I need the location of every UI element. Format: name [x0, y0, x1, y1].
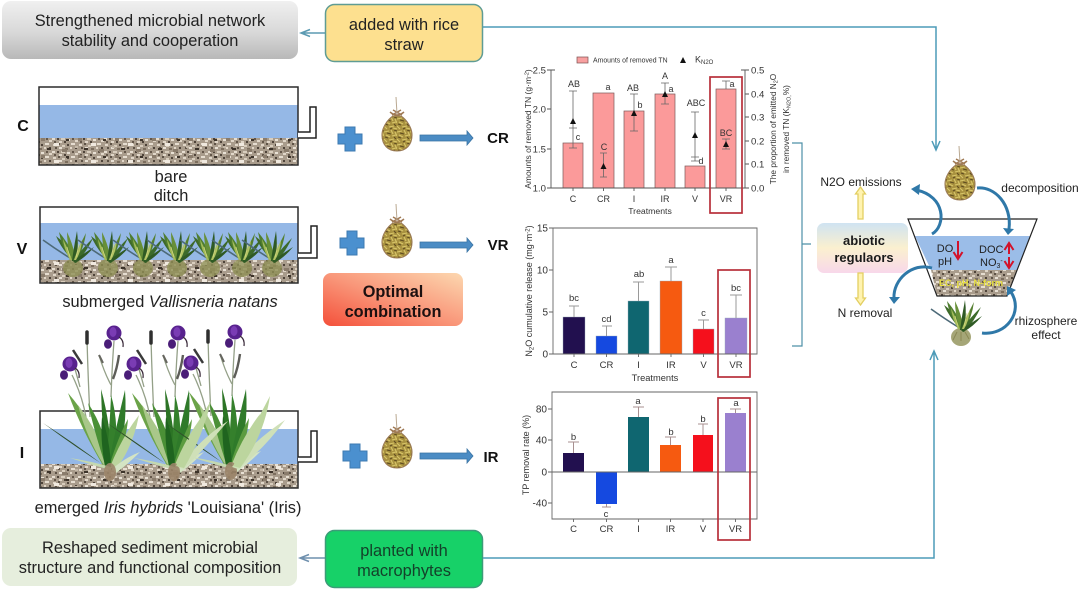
- label: decomposition: decomposition: [1001, 181, 1079, 195]
- legend: K: [695, 54, 701, 64]
- significance letters: c: [701, 308, 706, 319]
- chart: removed TN and KN2O: 0.4: [751, 90, 765, 100]
- significance letters: [569, 255, 741, 325]
- label: rhizosphere effect: [1015, 314, 1078, 342]
- chart: N2O cumulative release: I: [637, 360, 640, 371]
- significance letters: a: [733, 398, 739, 409]
- box: strengthened microbial network: [2, 1, 298, 59]
- label: DO pH: pH: [938, 256, 952, 268]
- chart: removed TN and KN2O: 0.5: [751, 66, 764, 76]
- chart: removed TN and KN2O: N2O,: [786, 95, 792, 108]
- significance letters: b: [571, 432, 576, 443]
- bars: [563, 89, 736, 188]
- icon: straw bag I: [382, 414, 412, 468]
- icon: plus I: [343, 444, 367, 468]
- axes: [547, 70, 749, 191]
- significance letters: c: [576, 132, 581, 142]
- bracket: links charts to mechanism: [792, 143, 811, 346]
- chart: removed TN and KN2O: 2.0: [533, 104, 546, 116]
- diagram: funnel tank: [908, 219, 1037, 296]
- callout: optimal combination: Optimal: [363, 283, 423, 301]
- icon: submerged plant: [931, 300, 982, 346]
- arrow head rhizosphere: [1007, 286, 1016, 296]
- chart: removed TN and KN2O: Amounts of removed TN (g·m: [523, 77, 533, 189]
- caption: bare ditch: ditch: [154, 187, 188, 205]
- callout: optimal combination: [323, 273, 463, 326]
- icon: plus C: [338, 127, 362, 151]
- chart: N2O cumulative release: ): [524, 225, 534, 228]
- box: planted with macrophytes: [326, 530, 482, 588]
- label: N removal: N removal: [838, 306, 892, 320]
- chart: removed TN and KN2O: [523, 54, 792, 216]
- arrow: C to CR: [420, 131, 473, 145]
- significance letters: bc: [731, 283, 741, 294]
- chart: TP removal rate: IR: [666, 524, 675, 535]
- arrow: down to N removal: [856, 273, 866, 305]
- icon: plus V: [340, 231, 364, 255]
- error bars: [568, 407, 741, 507]
- highlight box: [710, 77, 742, 213]
- chart: removed TN and KN2O: IR: [660, 194, 670, 204]
- chart: removed TN and KN2O: 0.3: [751, 112, 764, 124]
- chart: TP removal rate: V: [700, 524, 707, 535]
- highlight box: [718, 398, 750, 540]
- label: VR: VR: [488, 237, 509, 254]
- caption: emerged iris: emerged Iris hybrids 'Louisiana' (Iris): [35, 499, 301, 517]
- box: reshaped sediment: [2, 528, 297, 586]
- legend: [577, 54, 714, 66]
- chart: removed TN and KN2O: -2: [524, 72, 530, 77]
- chart: removed TN and KN2O: CR: [597, 194, 610, 204]
- chart: N2O cumulative release: VR: [729, 360, 743, 371]
- chart: removed TN and KN2O: 0.1: [751, 160, 764, 170]
- chart: removed TN and KN2O: ): [523, 69, 533, 72]
- arrow: I to IR: [420, 449, 473, 463]
- axes: [549, 228, 757, 357]
- arrow: decomposition curve: [977, 188, 1009, 229]
- arrow: up to N2O: [856, 187, 866, 219]
- chart: N2O cumulative release: -2: [526, 228, 532, 234]
- label: CR: CR: [487, 130, 509, 147]
- label: DO pH: [937, 243, 954, 268]
- label: rhizosphere effect: effect: [1031, 328, 1061, 342]
- chart: N2O cumulative release: O cumulative release (mg·m: [524, 234, 534, 347]
- highlight box: [718, 270, 750, 377]
- box: planted with macrophytes: macrophytes: [357, 562, 451, 580]
- chart: TP removal rate: [521, 392, 757, 540]
- label: sediment factors: EC, pH, N-form: [939, 278, 1003, 288]
- error bars: [569, 267, 742, 336]
- panel: tank V: [40, 207, 317, 283]
- arrow: V to VR: [420, 238, 473, 252]
- panel: tank C: [39, 87, 316, 165]
- significance letters: A: [662, 71, 668, 81]
- label: DOC NO3: -: [1000, 258, 1003, 265]
- significance letters: bc: [569, 293, 579, 304]
- chart: TP removal rate: TP removal rate (%): [521, 415, 531, 495]
- significance letters: cd: [601, 314, 612, 325]
- chart: N2O cumulative release: 2: [530, 346, 536, 350]
- significance letters: AB: [627, 83, 639, 93]
- error bars: [569, 81, 730, 177]
- chart: TP removal rate: 40: [536, 436, 547, 446]
- label: DOC NO3: DOC: [979, 244, 1004, 256]
- label: I: I: [20, 445, 24, 462]
- chart: removed TN and KN2O: 1.5: [533, 144, 546, 156]
- box: reshaped sediment: Reshaped sediment microbial: [42, 539, 258, 557]
- icon: straw bag mechanism: [945, 146, 975, 200]
- chart: TP removal rate: 0: [541, 468, 547, 478]
- arrow head N removal: [889, 297, 900, 304]
- label: DOC NO3: 3: [996, 263, 1000, 270]
- chart: N2O cumulative release: N: [524, 350, 534, 357]
- significance letters: a: [729, 79, 735, 89]
- arrow: straw to mechanism: [483, 27, 940, 150]
- chart: TP removal rate: 80: [536, 404, 547, 416]
- chart: TP removal rate: -40: [533, 498, 547, 510]
- bars: [563, 281, 747, 354]
- label: N2O emissions: N2O emissions: [820, 175, 902, 189]
- chart: N2O cumulative release: V: [700, 360, 707, 371]
- chart: TP removal rate: CR: [600, 524, 613, 535]
- chart: removed TN and KN2O: 0.0: [751, 184, 764, 194]
- chart: N2O cumulative release: 5: [542, 308, 548, 318]
- panel: tank I: [40, 324, 317, 488]
- chart: removed TN and KN2O: 2: [774, 80, 780, 83]
- chart: removed TN and KN2O: %): [781, 85, 791, 95]
- arrow: macrophytes to mechanism: [483, 351, 938, 558]
- significance letters: BC: [720, 128, 733, 138]
- chart: removed TN and KN2O: 2.5: [533, 66, 546, 76]
- caption: submerged Vallisneria natans: submerged Vallisneria natans: [62, 293, 278, 311]
- chart: N2O cumulative release: Treatments: [632, 373, 679, 383]
- chart: removed TN and KN2O: The proportion of emitted N: [768, 83, 778, 184]
- significance letters: ABC: [687, 98, 706, 108]
- legend: N2O: [701, 60, 714, 66]
- chart: removed TN and KN2O: V: [692, 194, 698, 204]
- significance letters: a: [668, 84, 674, 94]
- label: C: C: [17, 118, 29, 135]
- significance letters: [571, 396, 739, 520]
- arrow: curved to N2O: [916, 190, 941, 234]
- bars: [563, 413, 746, 504]
- significance letters: b: [668, 427, 674, 438]
- significance letters: [568, 71, 735, 166]
- significance letters: a: [605, 82, 611, 92]
- label: IR: IR: [484, 449, 499, 466]
- arrow: curve to N removal: [894, 267, 932, 298]
- icon: straw bag V: [382, 204, 412, 258]
- box: strengthened microbial network: stability and cooperation: [62, 32, 238, 50]
- box: added with rice straw: [326, 4, 482, 62]
- chart: removed TN and KN2O: in removed TN (K: [781, 108, 791, 173]
- chart: removed TN and KN2O: 0.2: [751, 136, 764, 148]
- label: DOC NO3: NO: [980, 257, 996, 269]
- arrow head decomposition: [1003, 228, 1014, 235]
- chart: N2O cumulative release: [524, 224, 757, 383]
- arrow head N2O: [911, 184, 920, 195]
- chart: N2O cumulative release: 10: [537, 266, 548, 276]
- chart: removed TN and KN2O: VR: [720, 194, 733, 204]
- label: V: V: [17, 241, 28, 258]
- chart: N2O cumulative release: 15: [537, 224, 548, 234]
- box: abiotic regulators: [817, 223, 908, 273]
- icon: iris plants: [43, 324, 285, 481]
- chart: N2O cumulative release: 0: [542, 350, 548, 360]
- chart: N2O cumulative release: CR: [600, 360, 613, 371]
- significance letters: c: [604, 509, 609, 520]
- chart: N2O cumulative release: IR: [666, 360, 676, 371]
- significance letters: C: [601, 142, 608, 152]
- significance letters: ab: [634, 269, 644, 280]
- caption: bare ditch: bare: [155, 168, 187, 186]
- label: rhizosphere effect: rhizosphere: [1015, 314, 1078, 328]
- chart: removed TN and KN2O: O: [768, 73, 778, 80]
- box: abiotic regulators: abiotic: [843, 233, 885, 248]
- triangles: [570, 91, 729, 169]
- chart: N2O cumulative release: C: [571, 360, 578, 371]
- box: planted with macrophytes: planted with: [360, 542, 448, 560]
- box: abiotic regulators: regulaors: [834, 250, 894, 265]
- box: added with rice straw: added with rice: [349, 16, 459, 34]
- chart: removed TN and KN2O: Treatments: [628, 206, 672, 216]
- icon: straw bag C: [382, 97, 412, 151]
- legend: Amounts of removed TN: [593, 58, 668, 64]
- box: added with rice straw: straw: [384, 36, 424, 54]
- significance letters: a: [668, 255, 674, 266]
- significance letters: d: [698, 156, 704, 166]
- arrow: straw to network: [301, 30, 326, 36]
- box: strengthened microbial network: Strengthened microbial network: [35, 12, 266, 30]
- significance letters: b: [637, 100, 643, 110]
- chart: removed TN and KN2O: I: [633, 194, 635, 204]
- arrows: red changes: [954, 241, 1014, 268]
- chart: TP removal rate: VR: [729, 524, 742, 535]
- caption: bare ditch: [154, 168, 188, 205]
- chart: removed TN and KN2O: 1.0: [533, 184, 546, 194]
- label: DO pH: DO: [937, 243, 954, 255]
- arrow: macrophytes to sediment: [300, 554, 325, 562]
- chart: TP removal rate: I: [637, 524, 640, 535]
- significance letters: b: [700, 414, 706, 425]
- chart: removed TN and KN2O: C: [570, 194, 577, 204]
- significance letters: AB: [568, 79, 580, 89]
- callout: optimal combination: combination: [345, 303, 441, 321]
- chart: TP removal rate: C: [570, 524, 577, 535]
- significance letters: a: [635, 396, 641, 407]
- axes: [548, 392, 757, 522]
- arrow: rhizosphere curve: [982, 292, 1015, 333]
- label: DOC NO3: [979, 244, 1004, 270]
- box: reshaped sediment: structure and functional composition: [19, 559, 281, 577]
